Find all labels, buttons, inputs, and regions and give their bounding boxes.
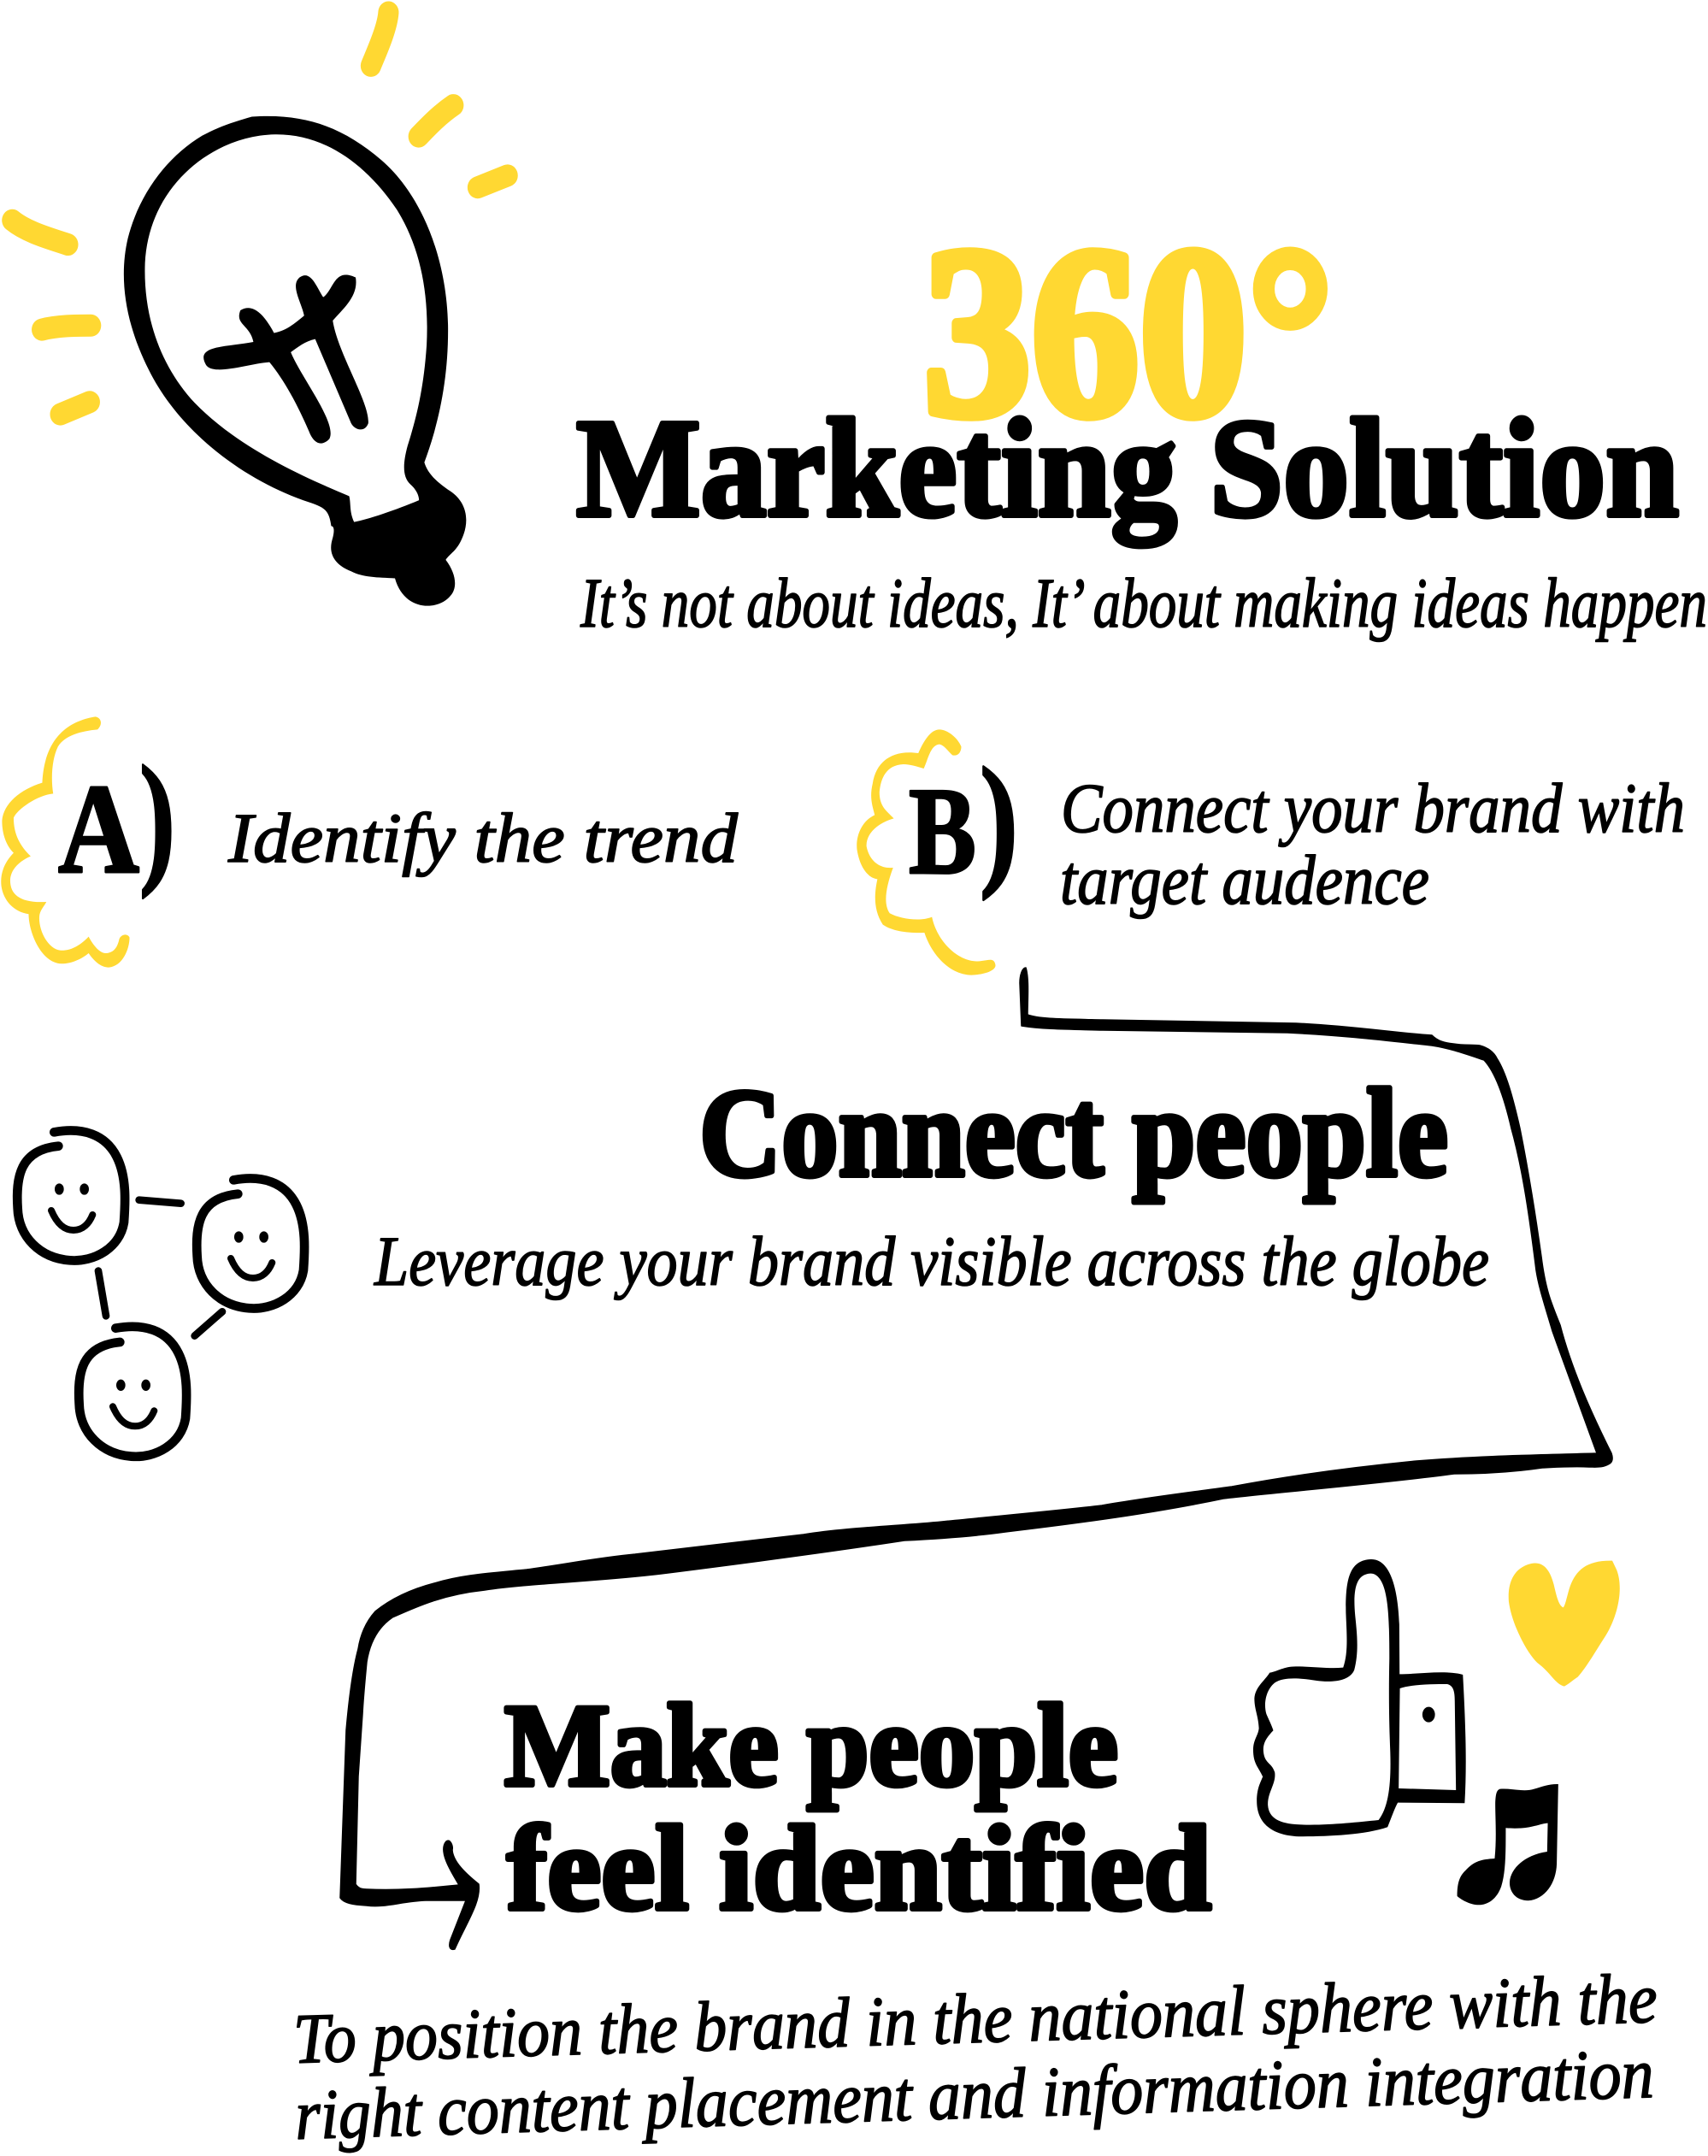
heading: Make people feel identified <box>504 1680 1211 1935</box>
label B <box>1060 769 1685 919</box>
text: Leverage your brand: Leverage your brand visible across the globe <box>374 1222 1489 1300</box>
letter B: B <box>909 762 976 900</box>
face 1 <box>17 1130 125 1261</box>
face 3 <box>79 1327 186 1457</box>
parenthesis A: ) <box>139 737 175 899</box>
label B: target audence <box>1060 840 1429 919</box>
text: closing statement <box>292 1959 1658 2154</box>
title: 360 degrees: 360° <box>923 197 1334 467</box>
bulb glass <box>144 134 427 522</box>
icon: light bulb with rays <box>12 12 508 606</box>
cloud outline B <box>857 729 995 975</box>
bulb outline <box>124 116 466 606</box>
face 2 <box>197 1178 304 1309</box>
icon: music notes <box>1458 1784 1558 1905</box>
bulb filament <box>203 274 368 444</box>
arrow: connector path from B to feel identified <box>340 968 1612 1949</box>
item B <box>857 729 1685 975</box>
icon: heart <box>1509 1561 1620 1687</box>
heading: Connect people: Connect people <box>699 1063 1448 1204</box>
label A: Identify the trend <box>227 798 739 877</box>
heading: Make people feel identified: Make people <box>504 1680 1118 1811</box>
parenthesis B: ) <box>980 739 1018 901</box>
icon: connected smiley faces <box>17 1130 304 1457</box>
icon: thumbs up <box>1253 1559 1466 1836</box>
bulb rays <box>12 12 508 415</box>
links between faces <box>98 1200 222 1336</box>
heading: Make people feel identified: feel identified <box>507 1800 1211 1935</box>
letter A: A <box>58 758 139 900</box>
cloud outline A <box>1 716 130 968</box>
item A <box>1 716 739 968</box>
